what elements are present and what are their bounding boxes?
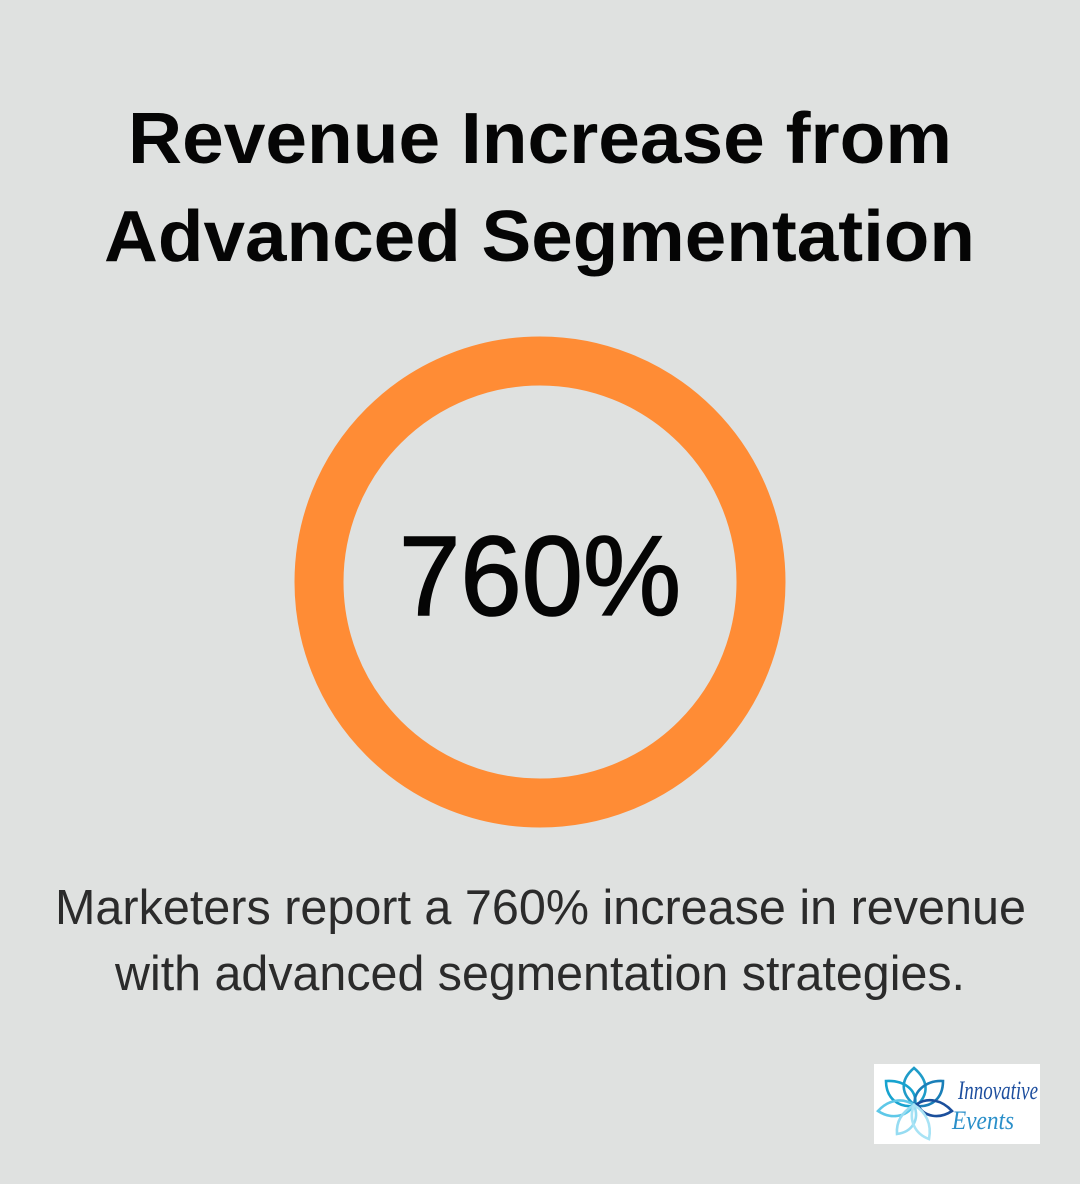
logo wordmark: Events — [951, 1106, 1014, 1135]
title — [104, 99, 975, 277]
logo wordmark: Innovative — [957, 1076, 1038, 1105]
big number: 760%: 760% — [399, 513, 681, 639]
icon: flower — [878, 1068, 952, 1139]
description text: with advanced segmentation strategies. — [114, 947, 965, 1001]
title: Advanced Segmentation — [104, 197, 975, 277]
logo wordmark — [951, 1076, 1038, 1135]
donut ring — [319, 361, 761, 803]
description text — [55, 881, 1026, 1001]
logo: Innovative Events — [874, 1064, 1040, 1144]
description text: Marketers report a 760% increase in revenue — [55, 881, 1026, 935]
title: Revenue Increase from — [128, 99, 952, 179]
